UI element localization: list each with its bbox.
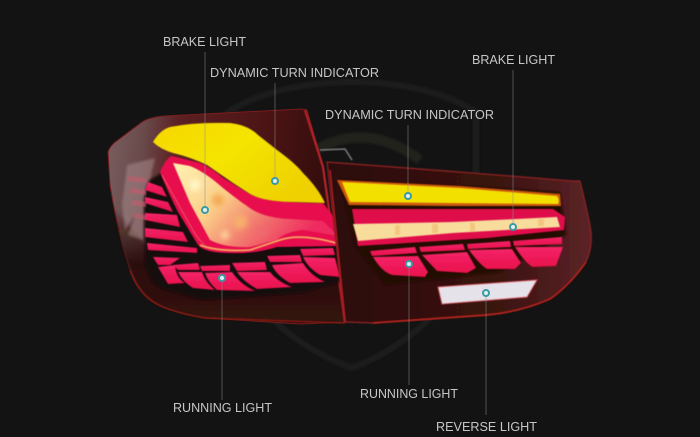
- yellow turn indicator: [153, 123, 325, 203]
- dark backing: [144, 172, 342, 300]
- lamp housing: [108, 109, 345, 324]
- red brake band: [352, 209, 565, 246]
- lamp housing: [327, 162, 591, 323]
- label: dynamic turn indicator right: DYNAMIC TURN INDICATOR: [325, 108, 494, 122]
- marker dots: [202, 178, 516, 296]
- glowing brake panel: [173, 163, 338, 247]
- left tail lamp: [108, 109, 345, 324]
- label: brake light left: BRAKE LIGHT: [163, 35, 246, 49]
- watermark shield: [228, 82, 476, 368]
- yellow turn indicator: [342, 182, 559, 204]
- label: running light right: RUNNING LIGHT: [360, 387, 458, 401]
- label: dynamic turn indicator left: DYNAMIC TURN INDICATOR: [210, 66, 379, 80]
- right tail lamp: [320, 149, 591, 323]
- label: running light left: RUNNING LIGHT: [173, 401, 272, 415]
- reverse light: [438, 280, 537, 304]
- leader lines: [205, 52, 513, 415]
- glowing brake strip: [353, 217, 560, 241]
- amber edge of indicator: [337, 180, 561, 206]
- red brake surround: [160, 156, 340, 253]
- label: brake light right: BRAKE LIGHT: [472, 53, 555, 67]
- label: reverse light: REVERSE LIGHT: [436, 420, 537, 434]
- running light blades, left lamp: [145, 182, 340, 291]
- bracket: [320, 149, 352, 160]
- running light blades, right lamp: [370, 237, 563, 277]
- faded gill reflections: [128, 176, 146, 220]
- pale reflection: [122, 158, 155, 240]
